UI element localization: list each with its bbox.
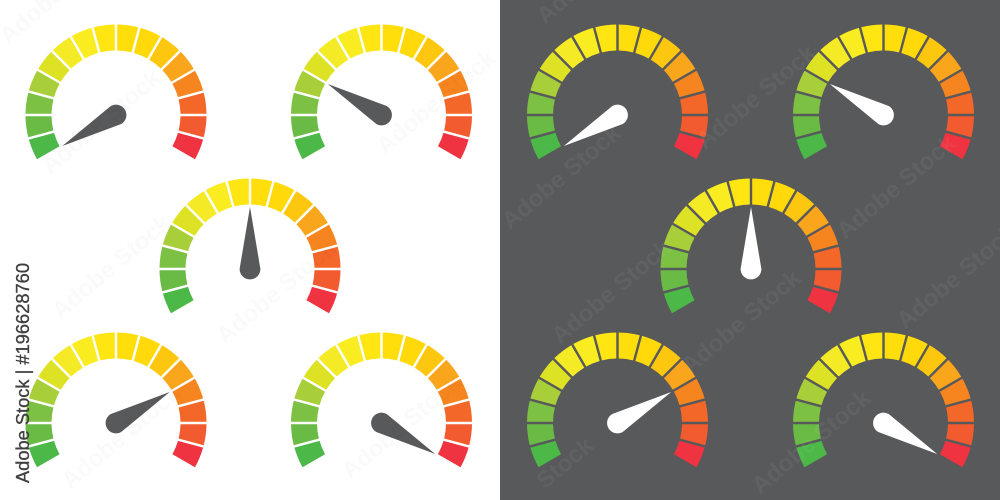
side credit text: Adobe Stock | #196628760: [13, 263, 33, 483]
watermarks: dark panel: Adobe Stock: [677, 264, 807, 380]
needle: light gauge low: [57, 101, 130, 155]
watermarks: dark panel: Adobe Stock: [497, 119, 627, 235]
watermarks: dark panel: [497, 0, 1000, 500]
gauge: light, needle medium-high: [25, 332, 207, 467]
gauge: light, needle middle: [159, 178, 341, 313]
needle: light gauge medium-high: [102, 383, 175, 437]
gauge: dark, needle medium-low: [792, 24, 975, 159]
needle: light gauge medium-low: [323, 75, 396, 129]
gauge: dark, needle low: [526, 24, 709, 159]
needle: dark gauge middle: [741, 207, 761, 279]
watermarks: light panel: Adobe Stock: [212, 234, 342, 350]
needle: dark gauge high: [869, 409, 942, 463]
gauge: light, needle high: [290, 332, 473, 467]
needle: dark gauge medium-high: [603, 383, 676, 437]
needle: dark gauge low: [559, 101, 632, 155]
watermarks: light panel: Adobe Stock: [337, 369, 467, 485]
panel: white background: [0, 0, 500, 500]
watermarks: dark panel: Adobe Stock: [547, 234, 677, 350]
watermarks: dark panel: Stock: [532, 431, 599, 495]
panel: dark background: [500, 0, 1000, 500]
watermarks: light panel: [0, 0, 502, 495]
watermarks: light panel: Adobe Stock: [372, 44, 502, 160]
watermarks: light panel: Adobe Stock: [47, 209, 177, 325]
needle: light gauge high: [367, 409, 440, 463]
gauge: dark, needle high: [792, 332, 975, 467]
needle: dark gauge medium-low: [825, 75, 898, 129]
watermarks: dark panel: Adobe Stock: [692, 39, 822, 155]
gauge: light, needle low: [25, 24, 207, 159]
gauge: dark, needle medium-high: [526, 332, 709, 467]
watermarks: dark panel: Adobe Stock: [747, 384, 877, 500]
watermarks: light panel: Adobe Stock: [57, 379, 187, 495]
gauge: dark, needle middle: [660, 178, 842, 313]
needle: light gauge middle: [240, 207, 260, 279]
watermarks: light panel: Adobe Stock: [37, 64, 167, 180]
gauge: light, needle medium-low: [290, 24, 473, 159]
watermarks: dark panel: Adobe Stock: [832, 129, 962, 245]
